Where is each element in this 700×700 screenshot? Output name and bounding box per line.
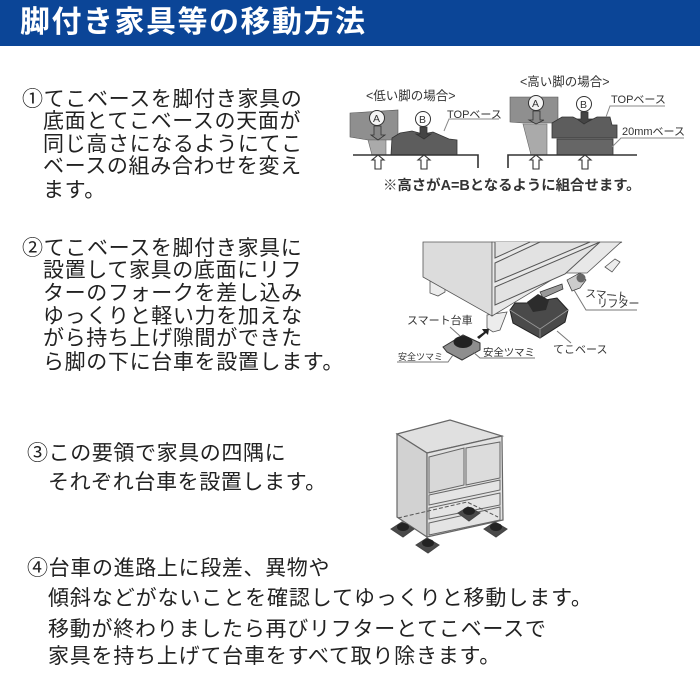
furniture cabinet	[423, 242, 622, 332]
smart dolly: 安全ツマミ	[398, 351, 443, 362]
dolly: front	[416, 538, 439, 553]
smart lifter: スマート	[585, 288, 627, 304]
lever base	[510, 294, 607, 356]
step 1 text: ます。	[43, 179, 106, 202]
step 3 text: ③この要領で家具の四隅に	[27, 442, 286, 465]
dolly: back center	[458, 507, 480, 521]
lever base: てこベース	[553, 344, 607, 356]
step 3 text	[27, 442, 327, 494]
step 1 text: 底面とてこベースの天面が	[43, 110, 301, 133]
smart dolly: スマート台車	[407, 313, 473, 327]
step 3 text: それぞれ台車を設置します。	[48, 471, 327, 494]
step 4 text: ④台車の進路上に段差、異物や	[27, 557, 330, 580]
low leg case: A	[373, 113, 380, 125]
step 4 text: 移動が終わりましたら再びリフターとてこベースで	[48, 618, 547, 641]
step 2 text	[22, 237, 344, 374]
step 2 text: 設置して家具の底面にリフ	[43, 259, 302, 282]
step 1 text	[22, 88, 303, 202]
high leg case: B	[580, 99, 587, 111]
step 1 text: 同じ高さになるようにてこ	[43, 133, 303, 156]
high leg case: A	[532, 98, 539, 110]
step 4 text: 傾斜などがないことを確認してゆっくりと移動します。	[48, 587, 593, 610]
low leg case	[350, 88, 502, 169]
dolly: left	[391, 522, 414, 537]
low leg case: B	[419, 114, 426, 126]
step 2 text: ら脚の下に台車を設置します。	[43, 351, 344, 374]
dolly: right	[484, 522, 507, 537]
high leg case: TOPベース	[611, 94, 666, 106]
step 1 text: ベースの組み合わせを変え	[43, 155, 302, 178]
step 2 text: ターのフォークを差し込み	[43, 282, 303, 305]
smart lifter: リフター	[597, 297, 639, 310]
low leg case: TOPベース	[447, 109, 502, 121]
step 4 text	[27, 557, 593, 668]
smart dolly	[397, 313, 535, 362]
header banner	[0, 0, 700, 46]
diagram note: ※高さがA=Bとなるように組合せます。	[383, 176, 641, 194]
low leg case: <低い脚の場合>	[366, 88, 456, 103]
smart lifter	[540, 273, 639, 310]
high leg case: 20mmベース	[622, 126, 685, 138]
high leg case: <高い脚の場合>	[520, 74, 610, 89]
step 2 text: ②てこベースを脚付き家具に	[22, 237, 302, 260]
title: 脚付き家具等の移動方法	[20, 6, 366, 39]
step 2 text: ゆっくりと軽い力を加えな	[43, 305, 303, 328]
smart dolly: 安全ツマミ	[483, 346, 535, 359]
step 4 text: 家具を持ち上げて台車をすべて取り除きます。	[48, 645, 501, 668]
high leg case	[508, 74, 685, 169]
step 1 text: ①てこベースを脚付き家具の	[22, 88, 302, 111]
step 2 text: がら持ち上げ隙間ができた	[43, 327, 303, 350]
